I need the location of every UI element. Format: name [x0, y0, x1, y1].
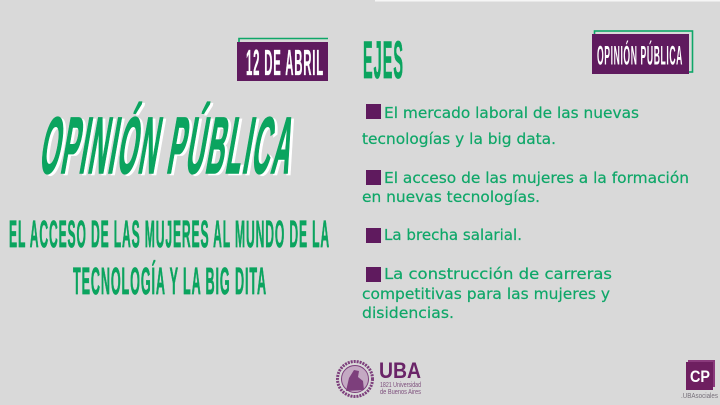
- list item: acceso a la formación: [362, 169, 689, 206]
- badge: opinión pública: [592, 31, 692, 74]
- list item: acceso a la formación: en nuevas tecnologías.: [362, 188, 540, 206]
- list item: mercado laboral: tecnologías y la big data.: [362, 130, 556, 148]
- logo: UBA: UBA: [379, 358, 421, 383]
- list item: mercado laboral: [362, 104, 639, 148]
- text: 12 DE ABRIL: [246, 42, 324, 83]
- list item: carreras competitivas: La construcción de carreras: [384, 265, 612, 283]
- list item: mercado laboral: El mercado laboral de las nuevas: [384, 104, 639, 122]
- logo: UBA: 1821 Universidad: [380, 380, 421, 389]
- list item: brecha salarial: La brecha salarial.: [384, 226, 522, 244]
- text: EJES: [363, 31, 404, 90]
- logo: UBA: de Buenos Aires: [380, 387, 421, 396]
- logo: CP sociales: CP: [690, 367, 710, 386]
- list item: carreras competitivas: competitivas para las mujeres y: [362, 285, 610, 303]
- list item: carreras competitivas: [362, 265, 612, 322]
- logo: CP sociales: [681, 360, 718, 400]
- list item: carreras competitivas: disidencias.: [362, 304, 454, 322]
- text: TECNOLOGÍA Y LA BIG DITA: [73, 259, 267, 303]
- date badge: 12 de abril: [237, 38, 328, 83]
- subtitle: [9, 214, 330, 303]
- main title: Opinión Pública: [35, 101, 306, 192]
- logo: UBA: [338, 358, 421, 396]
- list item: acceso a la formación: El acceso de las mujeres a la formación: [384, 169, 689, 187]
